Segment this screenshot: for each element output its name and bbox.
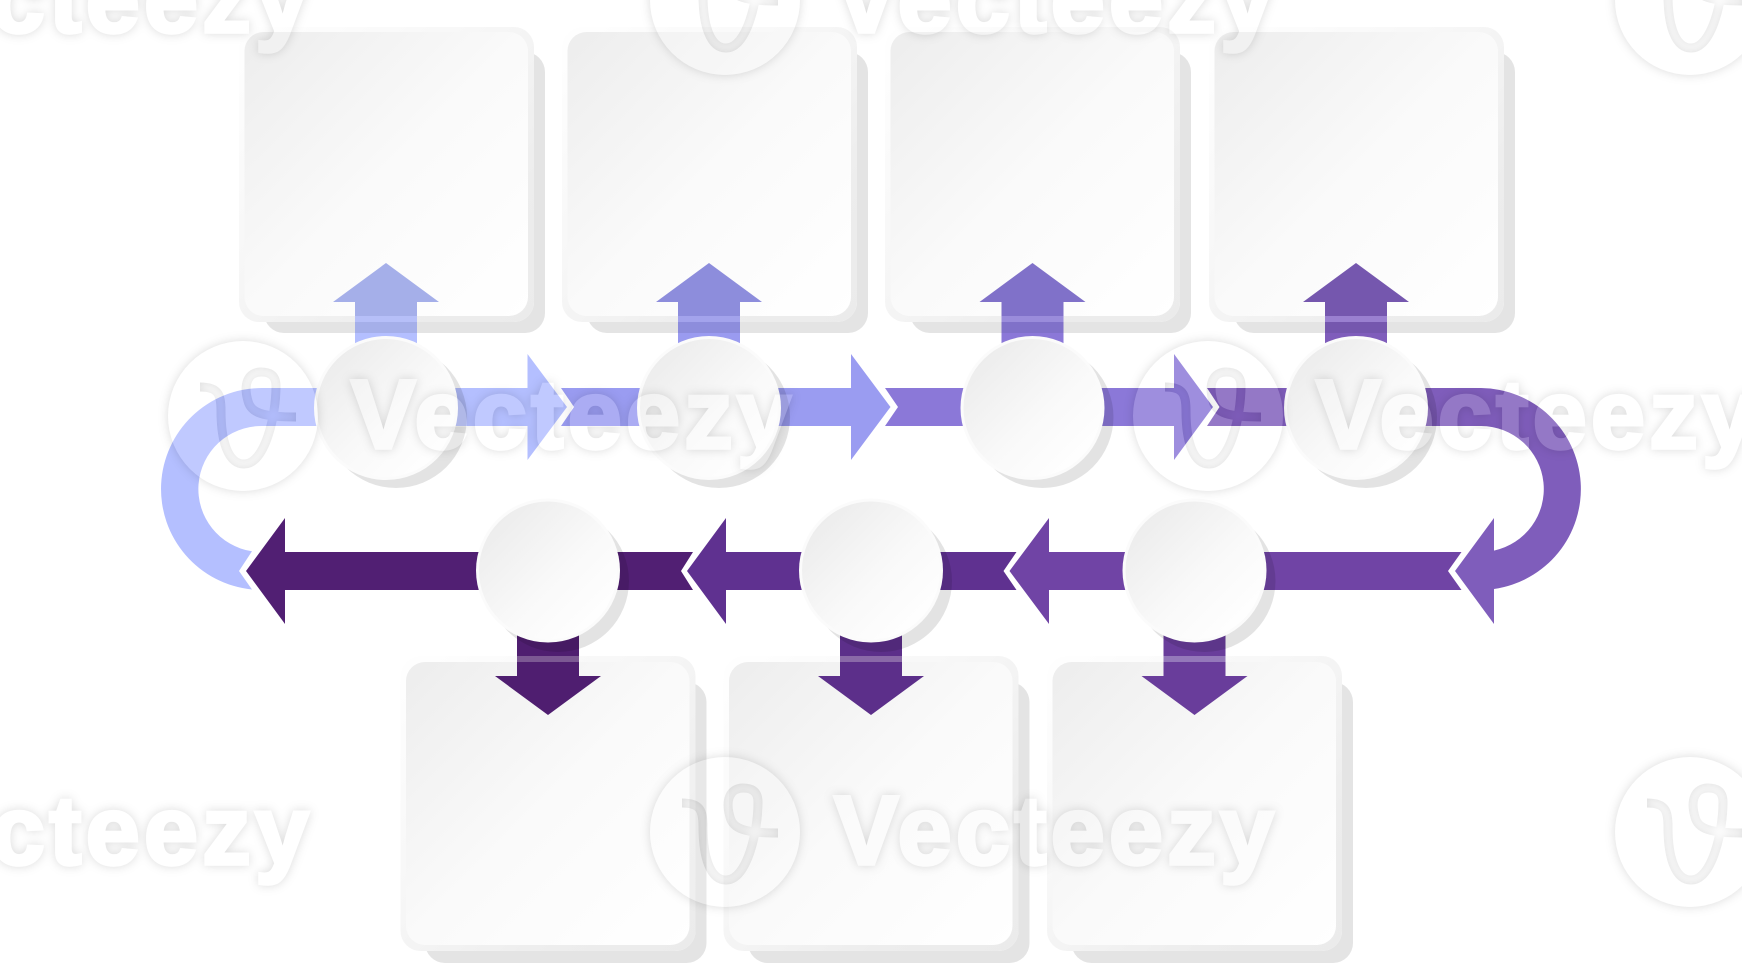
arrow: down to bottom card 1 [495,630,601,715]
panel: bottom card 2 [724,656,1030,963]
node circle 3 [960,336,1114,488]
node circle 7 [1122,498,1276,652]
panel: top card 1 [239,27,545,333]
arrow: flow segment 6 [687,518,1016,624]
arrow: up to card 2 [656,263,762,347]
panel: top card 3 [885,27,1191,333]
watermark: repeated Vecteezy marks: Vecteezy [834,776,1274,885]
node circle 6 [799,498,952,652]
watermark: repeated Vecteezy marks: Vecteezy [351,360,791,469]
arrow: up to card 4 [1303,263,1409,347]
arrow: flow segment 2 [561,354,890,460]
panel: top card 4 [1209,27,1515,333]
panel: bottom card 1 [400,656,706,963]
arrow: flow segment 5 [1010,518,1462,624]
panel: bottom card 3 [1047,656,1353,963]
node circle 4 [1284,336,1437,488]
arrow: up to card 3 [980,263,1086,347]
panel: top card 2 [562,27,868,333]
node circle 5 [476,498,629,652]
arrow: flow segment 7 [246,518,693,624]
node circle 2 [637,336,790,488]
arrow: up to card 1 [333,263,439,347]
arrow: flow segment 4 with right curve [1207,388,1581,624]
arrow: flow segment 3 [885,354,1213,460]
arrow: flow segment 1 with left curve [161,354,567,590]
node circle 1 [314,336,467,488]
arrow: down to bottom card 2 [818,630,924,715]
arrow: down to bottom card 3 [1142,630,1248,715]
